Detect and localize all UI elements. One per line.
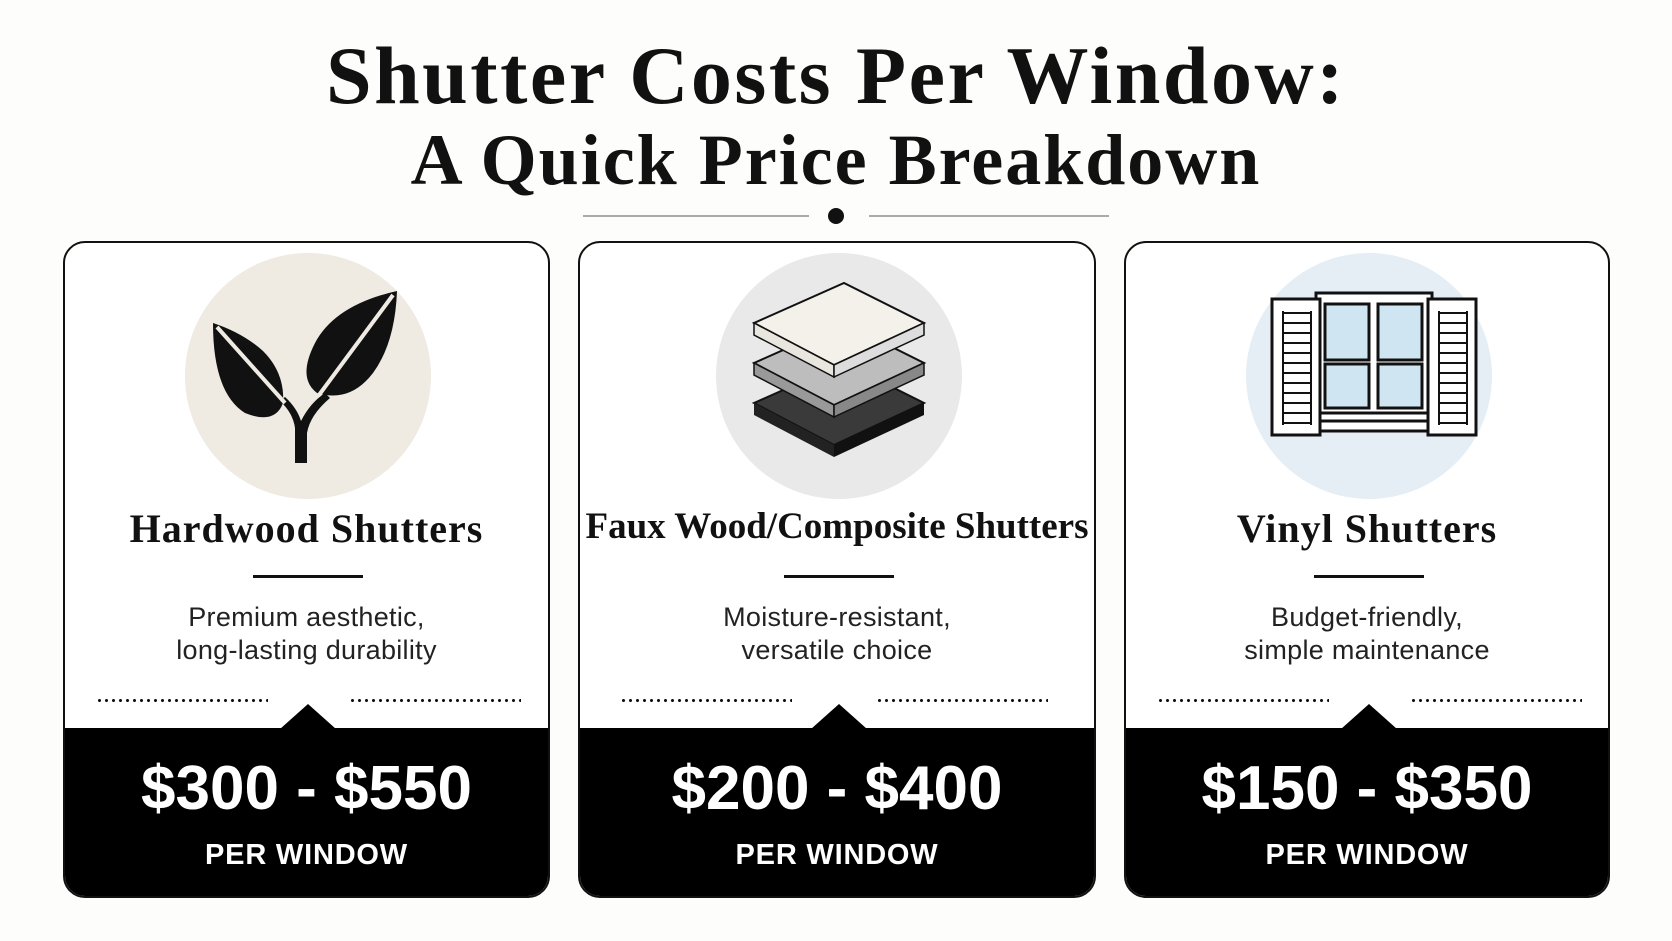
icon: window	[1246, 253, 1492, 499]
title divider	[583, 208, 1109, 224]
description: Budget-friendly,	[1271, 602, 1463, 632]
panel: vinyl	[1124, 241, 1610, 898]
description: long-lasting durability	[176, 635, 437, 665]
panel: vinyl: PER WINDOW	[1266, 839, 1468, 871]
description: Moisture-resistant,	[723, 602, 951, 632]
description: Premium aesthetic,	[188, 602, 425, 632]
panel: faux wood	[578, 241, 1096, 898]
price: $200 - $400	[672, 754, 1002, 823]
icon: layers	[716, 253, 962, 499]
panel: hardwood: PER WINDOW	[205, 839, 408, 871]
panel: hardwood	[63, 241, 550, 898]
heading: Vinyl Shutters	[1237, 506, 1497, 551]
description	[176, 602, 437, 665]
heading: Faux Wood/Composite Shutters	[586, 506, 1088, 547]
description	[1244, 602, 1490, 665]
title: Shutter Costs Per Window:	[326, 30, 1346, 121]
heading: Hardwood Shutters	[130, 506, 483, 551]
description: simple maintenance	[1244, 635, 1490, 665]
description: versatile choice	[742, 635, 932, 665]
price: $300 - $550	[141, 754, 472, 823]
icon: leaves	[185, 253, 431, 499]
subtitle: A Quick Price Breakdown	[411, 120, 1261, 200]
panel: faux wood: PER WINDOW	[736, 839, 938, 871]
price: $150 - $350	[1202, 754, 1532, 823]
description	[723, 602, 951, 665]
